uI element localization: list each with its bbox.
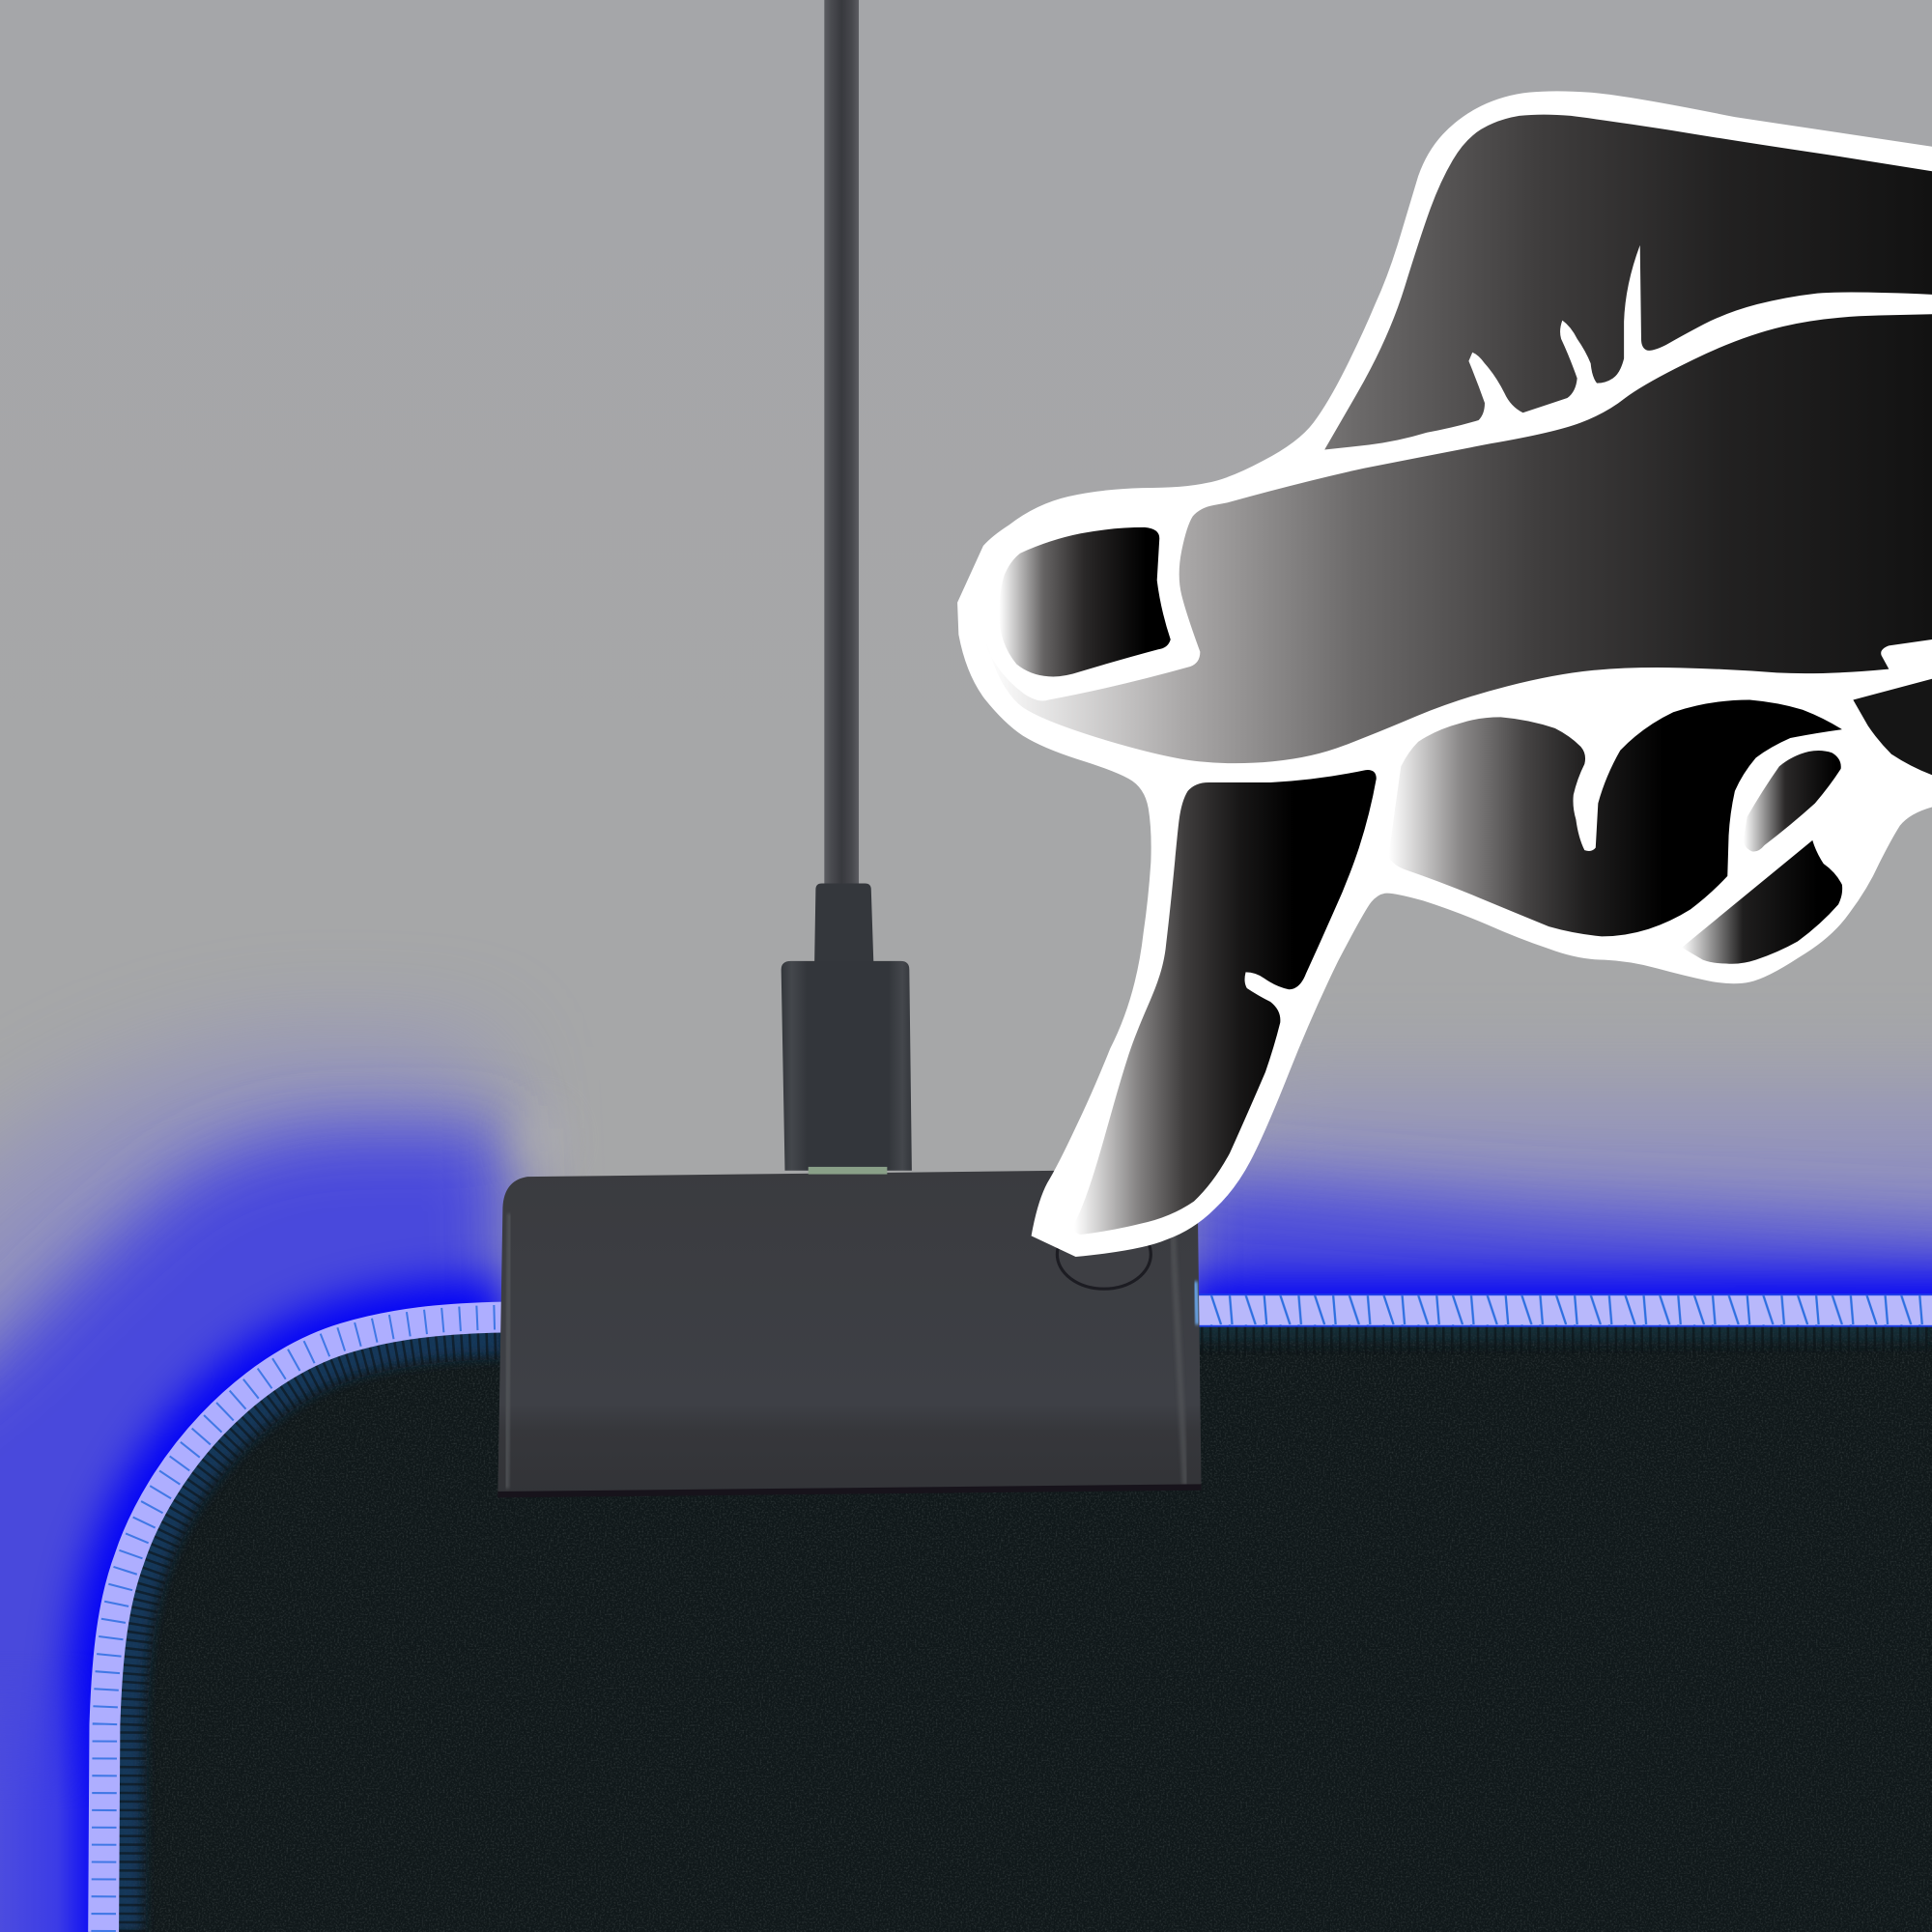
pointing finger pressing button bbox=[1074, 770, 1377, 1235]
USB connector housing bbox=[781, 961, 912, 1171]
hand icon pressing the button bbox=[957, 91, 1932, 1257]
pad surface bbox=[103, 1310, 1932, 1932]
control box body bbox=[497, 1169, 1202, 1495]
curled finger tip bbox=[1682, 840, 1842, 964]
USB metal tip bbox=[809, 1167, 887, 1175]
curled middle finger bbox=[1389, 699, 1842, 936]
control box front edge bbox=[497, 1488, 1202, 1494]
pad fabric texture bbox=[139, 1329, 1932, 1932]
pad stitched border bbox=[103, 1310, 1932, 1932]
hand white outline bbox=[957, 91, 1932, 1257]
ring fingernail bbox=[1744, 751, 1841, 852]
USB-C cable bbox=[781, 0, 912, 1175]
LED light strip bbox=[103, 1293, 1932, 1932]
index fingernail bbox=[999, 527, 1171, 676]
control box bbox=[497, 1169, 1202, 1495]
control box right bevel bbox=[1172, 1213, 1185, 1485]
palm edge bbox=[1853, 679, 1932, 775]
index finger bbox=[979, 314, 1932, 763]
control box left bevel bbox=[506, 1213, 510, 1489]
blue LED glow bbox=[0, 1041, 1932, 1932]
touch button bbox=[1057, 1220, 1151, 1289]
right edge LED reflection bbox=[1195, 1282, 1198, 1324]
mouse pad bbox=[74, 1282, 1932, 1932]
cable wire bbox=[824, 0, 859, 890]
cable strain relief bbox=[814, 884, 873, 963]
back of hand with knuckle creases bbox=[1324, 115, 1932, 450]
